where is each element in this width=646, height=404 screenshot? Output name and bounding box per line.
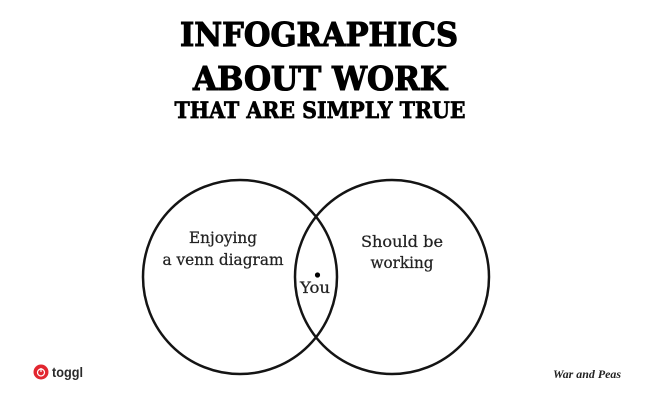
title: ABOUT WORK — [192, 59, 448, 98]
venn diagram — [143, 180, 489, 374]
label: should be working: Should be — [361, 232, 443, 251]
title: THAT ARE SIMPLY TRUE — [174, 98, 466, 124]
circle: enjoying a venn diagram — [143, 180, 337, 374]
credit: war and peas: War and Peas — [553, 367, 621, 381]
label: you: You — [299, 278, 330, 297]
title — [174, 15, 466, 124]
title: INFOGRAPHICS — [180, 15, 458, 54]
circle: should be working — [295, 180, 489, 374]
label: should be working: working — [370, 253, 434, 272]
dot: you — [315, 272, 320, 278]
logo: toggl — [34, 364, 83, 380]
label: enjoying a venn diagram — [162, 228, 284, 269]
wordmark: toggl — [52, 364, 83, 380]
label: enjoying a venn diagram: a venn diagram — [162, 250, 284, 269]
label: enjoying a venn diagram: Enjoying — [189, 228, 257, 247]
icon: power button — [34, 364, 48, 380]
label: should be working — [361, 232, 443, 272]
